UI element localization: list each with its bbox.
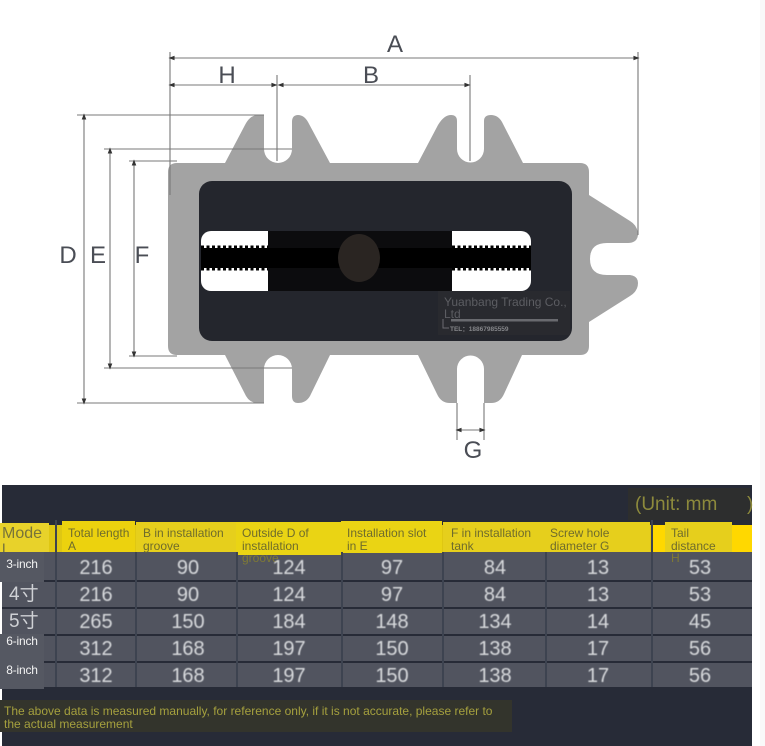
row 5-inch values: 150 [171, 611, 205, 633]
header labels: B in installation [143, 526, 224, 540]
threaded screw [201, 247, 531, 269]
row 3-inch values: 13 [587, 557, 609, 579]
model labels: 8-inch [6, 663, 38, 677]
row 6-inch values: 168 [171, 638, 205, 660]
header labels: Tail [671, 526, 689, 540]
row 5-inch values: 184 [272, 611, 306, 633]
row 6-inch values: 138 [478, 638, 512, 660]
model labels: 4寸 [9, 584, 39, 605]
header labels: A [68, 538, 76, 552]
row 6-inch values: 17 [587, 638, 609, 660]
technical drawing with dimensions [59, 31, 640, 464]
row 4-inch values: 84 [484, 584, 506, 606]
row 6-inch values: 197 [272, 638, 306, 660]
row 8-inch values: 168 [171, 665, 205, 687]
measurement disclaimer note: the actual measurement [4, 716, 133, 730]
company watermark: Yuanbang Trading Co., [444, 295, 567, 309]
row 4-inch values: 13 [587, 584, 609, 606]
header labels: diameter G [550, 538, 609, 552]
dimension B: B [363, 62, 379, 89]
row 5-inch values: 45 [689, 611, 711, 633]
row 8-inch values: 56 [689, 665, 711, 687]
row 4-inch values: 216 [79, 584, 113, 606]
row 5-inch values [79, 611, 711, 633]
dark plate [199, 181, 572, 341]
row 5-inch values: 148 [375, 611, 409, 633]
header labels: Screw hole [550, 526, 609, 540]
gray profile outline [168, 115, 638, 403]
row 3-inch values [79, 557, 711, 579]
header labels: F in installation [451, 526, 531, 540]
dimension G: G [464, 437, 482, 464]
header labels: installation [242, 538, 299, 552]
model labels: 6-inch [6, 634, 38, 648]
unit label: (Unit: mm [635, 494, 717, 515]
header labels: l [2, 542, 6, 559]
header labels: groove [242, 551, 279, 565]
header labels: Total length [68, 526, 129, 540]
row 8-inch values: 138 [478, 665, 512, 687]
row 8-inch values: 150 [375, 665, 409, 687]
row 5-inch values: 134 [478, 611, 512, 633]
center hole [338, 234, 380, 282]
right white slot [440, 231, 531, 291]
dimension A [170, 31, 638, 235]
row 4-inch values: 53 [689, 584, 711, 606]
dimension E [90, 149, 292, 368]
row 3-inch values: 97 [381, 557, 403, 579]
row 6-inch values: 150 [375, 638, 409, 660]
dimension B [279, 62, 470, 161]
dimension D: D [59, 242, 77, 269]
left white slot [201, 231, 281, 291]
header labels: Outside D of [242, 526, 309, 540]
row 3-inch values: 53 [689, 557, 711, 579]
row 3-inch values: 216 [79, 557, 113, 579]
row 6-inch values: 312 [79, 638, 113, 660]
header labels: in E [347, 538, 368, 552]
row 6-inch values: 56 [689, 638, 711, 660]
row 3-inch values: 124 [272, 557, 306, 579]
header labels: H [671, 551, 680, 565]
specification table panel: ) [747, 494, 753, 515]
row 4-inch values [79, 584, 711, 606]
company watermark [438, 291, 570, 335]
header labels: Mode [2, 525, 42, 542]
row 5-inch values: 265 [79, 611, 113, 633]
row 4-inch values: 90 [177, 584, 199, 606]
dimension H [170, 62, 277, 161]
dimension F: F [135, 242, 149, 269]
model labels: 5寸 [9, 611, 39, 632]
row 8-inch values: 312 [79, 665, 113, 687]
unit label [628, 488, 750, 520]
dimension F [129, 161, 177, 356]
dimension G [457, 403, 484, 464]
black center block [268, 231, 452, 291]
row 5-inch values: 14 [587, 611, 609, 633]
specification table panel [0, 485, 753, 746]
measurement disclaimer note: The above data is measured manually, for reference only, if it is not accurate, please refer to [4, 704, 492, 718]
header labels [2, 525, 716, 565]
row 4-inch values: 97 [381, 584, 403, 606]
model labels: 3-inch [6, 557, 38, 571]
dimension H: H [218, 62, 236, 89]
measurement disclaimer note [0, 700, 512, 732]
dimension A: A [387, 31, 403, 58]
row 6-inch values [79, 638, 711, 660]
row 3-inch values: 84 [484, 557, 506, 579]
row 8-inch values: 197 [272, 665, 306, 687]
model labels [0, 552, 44, 689]
row 4-inch values: 124 [272, 584, 306, 606]
row 3-inch values: 90 [177, 557, 199, 579]
row 8-inch values [79, 665, 711, 687]
header labels: Installation slot [347, 526, 426, 540]
dimension D [59, 115, 264, 403]
row 8-inch values: 17 [587, 665, 609, 687]
header labels: tank [451, 538, 474, 552]
company watermark: TEL：18867985559 [450, 326, 509, 333]
dimension E: E [90, 242, 106, 269]
header labels: distance [671, 538, 716, 552]
header labels: groove [143, 538, 180, 552]
company watermark: Ltd [444, 307, 461, 321]
header band [0, 521, 752, 555]
